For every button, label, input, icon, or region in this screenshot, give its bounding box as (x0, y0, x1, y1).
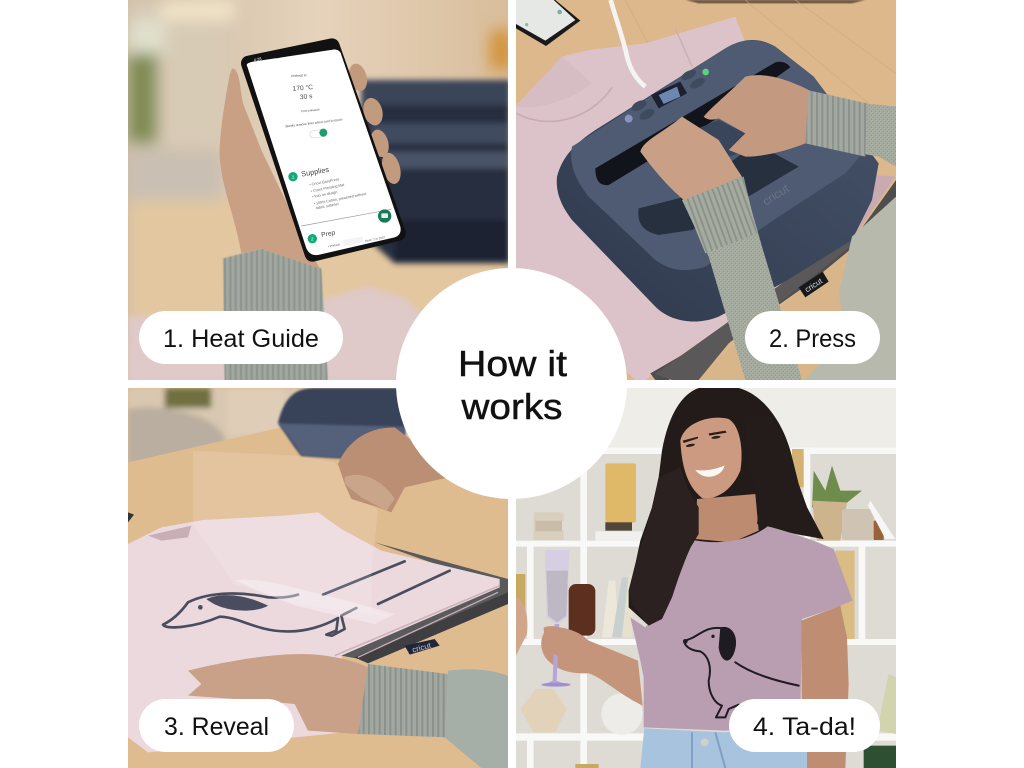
phone: Supplies (300, 165, 330, 179)
fingers (349, 64, 401, 184)
phone notch (276, 56, 286, 58)
title: How it (458, 343, 567, 384)
left arm and hand (541, 627, 643, 706)
step 1 supplies (288, 172, 298, 181)
sleeve (223, 248, 328, 382)
phone (247, 46, 401, 255)
heat guide readout (285, 73, 343, 128)
t-shirt (630, 526, 853, 731)
panel: 2 press photo (516, 0, 896, 380)
center circle (396, 268, 627, 499)
heat guide readout: 170 °C (292, 83, 314, 93)
phone: Heat" 2 in 2007 (365, 235, 386, 243)
background heat press (278, 388, 405, 462)
dog ear (719, 627, 736, 661)
phone: fabric softener (316, 202, 340, 210)
panel: 1 heat guide photo (128, 0, 513, 400)
small phone (516, 0, 580, 46)
fingers on glass (544, 626, 575, 657)
shelving (516, 447, 896, 768)
jeans (640, 721, 807, 768)
buttons (625, 115, 633, 123)
label: step 2: 2. Press (769, 325, 856, 353)
lower hand (188, 654, 368, 734)
label: step 1 (139, 311, 343, 364)
hand (220, 68, 320, 268)
label: step 4 (729, 699, 880, 752)
panel: 3 reveal photo (128, 388, 508, 768)
heat guide readout: Slowly remove liner when cool to touch (285, 117, 343, 128)
upper hand (338, 427, 448, 512)
label: step 2 (745, 311, 880, 364)
toggle (309, 129, 327, 138)
sleeve: right (805, 90, 896, 167)
dog ear (206, 595, 268, 611)
woman's hair (629, 388, 824, 626)
heat guide readout: Firm pressure (301, 107, 320, 113)
right arm (801, 606, 849, 768)
step 2 prep (308, 234, 317, 243)
mat label: cricut (411, 641, 433, 655)
phone: 1 (292, 174, 295, 179)
sleeve (358, 664, 448, 737)
phone: • Iron-on design (312, 190, 338, 199)
heat guide readout: 30 s (300, 93, 313, 101)
blurred heat press (361, 80, 510, 263)
heat press (557, 40, 879, 322)
power cable (611, 0, 645, 87)
smile (695, 465, 725, 477)
label: step 1: 1. Heat Guide (163, 325, 319, 353)
pressing mat (650, 180, 896, 380)
phone: 2 (311, 236, 314, 241)
chat button (378, 209, 391, 223)
phone: Prep (321, 230, 336, 239)
phone: • 100% Cotton, preashed without (313, 192, 367, 206)
infographic: how it works (128, 0, 896, 768)
dog nose (683, 639, 688, 644)
phone: • Cricut Pressing Mat (310, 183, 345, 193)
dog eye (711, 635, 715, 638)
label: step 3 (139, 699, 294, 752)
dog design (684, 628, 799, 717)
table (128, 428, 342, 476)
hand: right (704, 75, 809, 157)
status bar: 4:26 (253, 56, 263, 62)
t-shirt (128, 512, 500, 752)
display (651, 82, 687, 108)
mat label (405, 639, 440, 655)
transfer film (193, 451, 395, 624)
title: works (460, 386, 562, 427)
mat label: cricut (803, 276, 825, 294)
sleeve: left (682, 177, 802, 380)
face (680, 418, 742, 498)
press logo: cricut (760, 181, 792, 209)
far arm (805, 197, 896, 380)
eyebrows and eyes (683, 431, 727, 448)
shelf objects (516, 449, 896, 768)
label: step 4: 4. Ta-da! (753, 713, 856, 741)
t-shirt (516, 16, 784, 380)
small object at edge (128, 512, 134, 522)
mat label (799, 272, 829, 297)
phone: • Cricut EasyPress (309, 177, 340, 187)
hair front strands (629, 467, 699, 626)
neck (695, 494, 759, 542)
label: step 3: 3. Reveal (164, 713, 269, 741)
dog eye (198, 605, 203, 610)
panel: 4 ta-da photo (516, 388, 896, 768)
dog design (163, 561, 450, 636)
other person's hand (516, 597, 527, 656)
heat guide readout: Preheat to (291, 73, 307, 78)
champagne flute (541, 550, 571, 687)
blurred t-shirt (128, 287, 428, 382)
hand: left (640, 117, 742, 200)
pressing mat (341, 542, 508, 661)
phone: • Preheat (327, 242, 340, 249)
